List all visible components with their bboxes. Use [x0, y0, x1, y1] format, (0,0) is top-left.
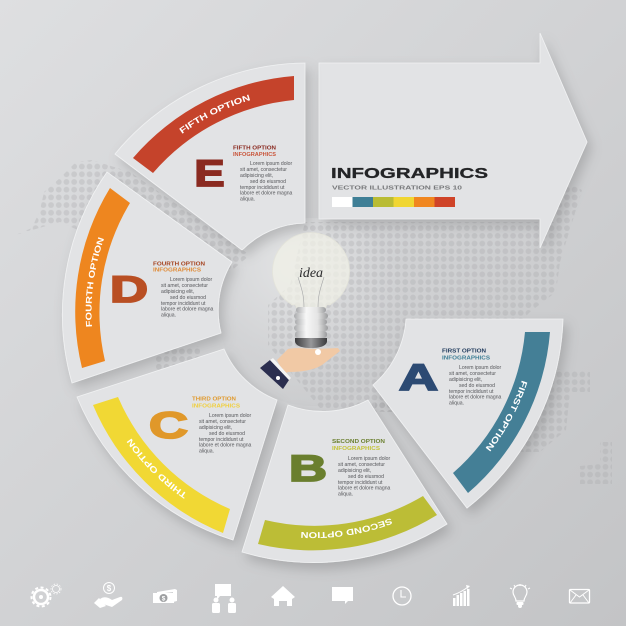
icon: speech bubble: [332, 587, 353, 604]
central hub circle: [218, 218, 406, 406]
text block E: FIFTH OPTION: [233, 146, 276, 152]
band label E: FIFTH OPTION: [179, 94, 250, 134]
icon: idea bulb: [510, 584, 530, 608]
icon: hand with coin: [94, 582, 122, 608]
text block B: Lorem ipsum dolor: [348, 456, 390, 462]
dotted world map: [15, 160, 612, 484]
filament: [298, 277, 324, 308]
text block A: aliqua.: [449, 400, 464, 406]
text block C: tempor incididunt ut: [199, 437, 244, 443]
text block D: sed do eiusmod: [170, 295, 206, 301]
letter C: C: [149, 405, 188, 446]
band C: [93, 397, 230, 533]
letter D: D: [110, 269, 148, 310]
text block E: tempor incididunt ut: [240, 185, 285, 191]
icon: meeting people: [212, 584, 236, 613]
band label C: THIRD OPTION: [126, 438, 186, 499]
bulb glass: [272, 233, 350, 308]
band A: [453, 332, 550, 493]
text block C: adipisicing elit,: [199, 425, 232, 431]
text block A: INFOGRAPHICS: [442, 356, 491, 362]
text block D: adipisicing elit,: [161, 289, 194, 295]
text block D: aliqua.: [161, 312, 176, 318]
segment C: [77, 349, 277, 540]
letter A: A: [399, 357, 438, 398]
text block A: FIRST OPTION: [442, 348, 486, 354]
text block E: adipisicing elit,: [240, 173, 273, 179]
letter B: B: [289, 448, 327, 489]
text block C: THIRD OPTION: [192, 396, 236, 402]
text block D: Lorem ipsum dolor: [170, 277, 212, 283]
text block D: sit amet, consectetur: [161, 283, 208, 289]
text block A: sed do eiusmod: [459, 383, 495, 389]
heading: infographics: INFOGRAPHICS: [331, 166, 488, 182]
icon: hand: [260, 348, 340, 389]
icon: gears: [32, 584, 61, 606]
icon: hand with coin: $: [107, 584, 112, 593]
icon: envelope: [570, 590, 590, 603]
text block D: INFOGRAPHICS: [153, 268, 202, 274]
panel: third option: [76, 348, 283, 548]
text block A: adipisicing elit,: [449, 377, 482, 383]
text block C: labore et dolore magna: [199, 442, 252, 448]
button: [276, 376, 280, 380]
icon: banknotes: $: [162, 596, 166, 602]
panel: first option: [372, 318, 571, 514]
palm: [277, 348, 340, 374]
icon: house: [271, 586, 295, 606]
text block D: labore et dolore magna: [161, 306, 214, 312]
icon: clock: [393, 587, 411, 605]
socket: [294, 307, 328, 348]
arrow shape: [319, 33, 587, 248]
band label B: SECOND OPTION: [301, 518, 392, 538]
text block A: tempor incididunt ut: [449, 389, 494, 395]
icon: growth chart: [453, 585, 470, 606]
text block B: sit amet, consectetur: [338, 462, 385, 468]
text block A: Lorem ipsum dolor: [459, 365, 501, 371]
subtitle: VECTOR ILLUSTRATION EPS 10: [332, 186, 462, 192]
band label D: FOURTH OPTION: [86, 237, 104, 327]
letter E: E: [194, 153, 224, 194]
panel: arrow header: [319, 33, 587, 248]
panel: second option: [242, 400, 452, 573]
text block A: labore et dolore magna: [449, 394, 502, 400]
text block D: FOURTH OPTION: [153, 262, 205, 268]
text block B: INFOGRAPHICS: [332, 446, 381, 452]
colour bar: [332, 197, 455, 207]
text block D: [153, 262, 214, 318]
band D: [75, 188, 130, 368]
text block B: labore et dolore magna: [338, 486, 391, 492]
icon row: [32, 582, 590, 613]
text block B: [332, 439, 391, 498]
text block E: aliqua.: [240, 196, 255, 202]
text block C: sed do eiusmod: [209, 431, 245, 437]
text block C: INFOGRAPHICS: [192, 404, 241, 410]
icon: banknotes: [153, 589, 177, 603]
panel: fifth option: [114, 62, 314, 258]
text block E: INFOGRAPHICS: [233, 152, 277, 158]
thumb highlight: [315, 349, 321, 355]
text block D: tempor incididunt ut: [161, 301, 206, 307]
segment B: [242, 400, 447, 563]
text block B: sed do eiusmod: [348, 474, 384, 480]
text block E: sit amet, consectetur: [240, 167, 287, 173]
text block B: adipisicing elit,: [338, 468, 371, 474]
text block B: tempor incididunt ut: [338, 480, 383, 486]
text block E: sed do eiusmod: [250, 179, 286, 185]
text block B: aliqua.: [338, 492, 353, 498]
text block C: aliqua.: [199, 448, 214, 454]
text block E: labore et dolore magna: [240, 190, 293, 196]
text block E: [233, 146, 293, 202]
band B: [258, 496, 437, 550]
text block B: SECOND OPTION: [332, 439, 385, 445]
text block C: [192, 396, 252, 454]
cuff: [260, 360, 289, 389]
text block C: Lorem ipsum dolor: [209, 413, 251, 419]
text block A: sit amet, consectetur: [449, 371, 496, 377]
white shirt edge: [270, 358, 291, 380]
band label A: FIRST OPTION: [486, 380, 528, 452]
segment E: [115, 63, 305, 250]
text block A: [442, 348, 502, 406]
panel: fourth option: [62, 172, 238, 390]
band E: [133, 76, 294, 173]
icon: light bulb: [272, 233, 350, 348]
text block E: Lorem ipsum dolor: [250, 161, 292, 167]
text block C: sit amet, consectetur: [199, 419, 246, 425]
segment D: [62, 172, 232, 383]
word: idea: idea: [299, 266, 323, 281]
segment A: [373, 319, 563, 508]
